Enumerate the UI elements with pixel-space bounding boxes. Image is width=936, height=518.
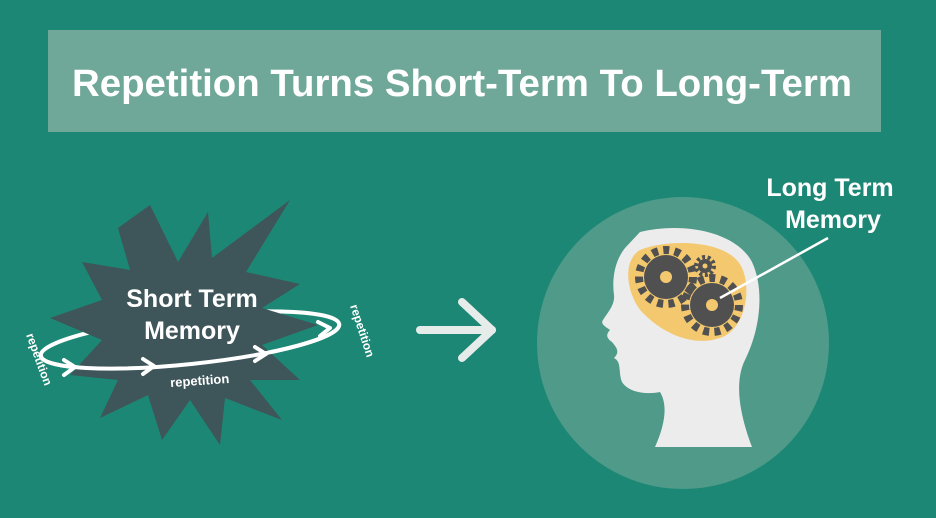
starburst shape xyxy=(50,200,318,445)
label: Short Term Memory: Short Term xyxy=(126,285,258,313)
panel: long term memory head xyxy=(537,174,894,489)
background circle xyxy=(537,197,829,489)
head silhouette xyxy=(602,228,759,447)
panel: short term memory starburst: repetition xyxy=(347,303,377,359)
panel: short term memory starburst xyxy=(23,200,377,445)
panel: short term memory starburst: Memory xyxy=(144,317,240,345)
repetition loop back half xyxy=(38,300,342,380)
repetition labels: repetition xyxy=(170,371,230,390)
label: Long Term Memory: Long Term xyxy=(766,174,894,202)
title xyxy=(48,30,881,132)
title: Repetition Turns Short-Term To Long-Term xyxy=(72,63,852,105)
panel: short term memory starburst: repetition xyxy=(23,331,55,387)
pointer line xyxy=(720,238,828,298)
gears xyxy=(639,250,739,332)
brain area xyxy=(628,243,746,341)
panel: long term memory head: Memory xyxy=(785,206,881,234)
repetition loop front half xyxy=(41,322,339,375)
arrow xyxy=(420,302,492,358)
